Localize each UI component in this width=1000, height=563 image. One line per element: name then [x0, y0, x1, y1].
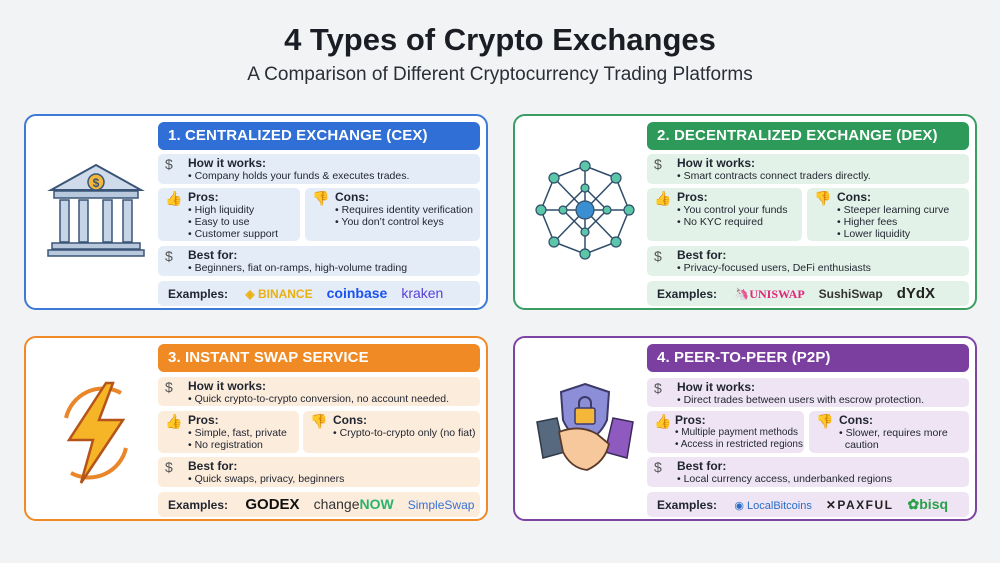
best for: • Privacy-focused users, DeFi enthusiasts — [677, 262, 871, 274]
how it works: How it works: — [188, 156, 266, 170]
pros: • No registration — [188, 439, 263, 451]
best for: • Quick swaps, privacy, beginners — [188, 473, 344, 485]
how it works: $ — [654, 156, 662, 172]
cons: 👎 — [814, 190, 831, 206]
cons: • Lower liquidity — [837, 228, 910, 240]
pros: • Easy to use — [188, 216, 249, 228]
panel: CEX — [24, 114, 488, 310]
icon: network — [535, 160, 635, 260]
how it works: • Company holds your funds & executes trades. — [188, 170, 409, 182]
cons: Cons: — [333, 413, 367, 427]
examples — [647, 492, 969, 517]
cons: 👎 — [310, 413, 327, 429]
pros: 👍 — [165, 190, 182, 206]
cons: caution — [845, 439, 879, 451]
cons: 👎 — [312, 190, 329, 206]
icon: bank: $ — [93, 176, 100, 190]
heading — [647, 122, 969, 150]
pros — [647, 411, 804, 453]
title: 4 Types of Crypto Exchanges — [284, 22, 716, 57]
best for — [647, 457, 969, 487]
cons: Cons: — [837, 190, 871, 204]
how it works — [158, 377, 480, 406]
pros: • Simple, fast, private — [188, 427, 287, 439]
best for: Best for: — [188, 459, 237, 473]
how it works: $ — [165, 156, 173, 172]
pros: Pros: — [188, 190, 219, 204]
examples: Examples: GODEX changeNOW SimpleSwap — [168, 496, 474, 513]
cons — [809, 411, 969, 453]
heading: 1. CENTRALIZED EXCHANGE (CEX) — [168, 127, 428, 144]
best for: $ — [654, 459, 662, 475]
examples — [647, 281, 969, 306]
how it works: How it works: — [188, 379, 266, 393]
cons: • Slower, requires more — [839, 427, 948, 439]
cons: Cons: — [335, 190, 369, 204]
how it works: • Smart contracts connect traders directly. — [677, 170, 871, 182]
cons: Cons: — [839, 413, 873, 427]
pros: • Multiple payment methods — [675, 427, 798, 438]
heading: 4. PEER-TO-PEER (P2P) — [657, 349, 831, 366]
heading: 2. DECENTRALIZED EXCHANGE (DEX) — [657, 127, 938, 144]
cons — [807, 188, 969, 241]
pros: Pros: — [675, 413, 706, 427]
pros: • High liquidity — [188, 204, 254, 216]
cons — [305, 188, 480, 241]
pros: • Access in restricted regions — [675, 439, 803, 450]
pros: Pros: — [677, 190, 708, 204]
cons: • Steeper learning curve — [837, 204, 949, 216]
best for: • Beginners, fiat on-ramps, high-volume trading — [188, 262, 407, 274]
best for: $ — [165, 248, 173, 264]
panel: DEX — [513, 114, 977, 310]
heading: 3. INSTANT SWAP SERVICE — [168, 349, 369, 366]
how it works: How it works: — [677, 156, 755, 170]
panel: P2P — [513, 336, 977, 521]
pros: • Customer support — [188, 228, 278, 240]
best for: • Local currency access, underbanked regions — [677, 473, 892, 485]
pros — [647, 188, 802, 241]
best for: Best for: — [188, 248, 237, 262]
cons: • Higher fees — [837, 216, 897, 228]
heading — [647, 344, 969, 372]
cons: • Crypto-to-crypto only (no fiat) — [333, 427, 476, 439]
how it works: • Quick crypto-to-crypto conversion, no account needed. — [188, 393, 449, 405]
best for: Best for: — [677, 459, 726, 473]
best for: $ — [165, 459, 173, 475]
how it works: $ — [654, 380, 662, 396]
examples — [158, 492, 480, 517]
pros — [158, 411, 299, 453]
examples — [158, 281, 480, 306]
how it works — [647, 378, 969, 407]
how it works: • Direct trades between users with escrow protection. — [677, 394, 924, 406]
pros — [158, 188, 300, 241]
icon: lightning — [64, 382, 128, 484]
pros: • No KYC required — [677, 216, 763, 228]
cons — [303, 411, 480, 453]
pros: 👍 — [654, 190, 671, 206]
subtitle: A Comparison of Different Cryptocurrency Trading Platforms — [247, 64, 753, 85]
best for — [647, 246, 969, 276]
pros: 👍 — [654, 413, 671, 429]
how it works — [647, 154, 969, 184]
best for — [158, 457, 480, 487]
cons: 👎 — [816, 413, 833, 429]
heading — [158, 122, 480, 150]
pros: Pros: — [188, 413, 219, 427]
pros: 👍 — [165, 413, 182, 429]
how it works: $ — [165, 379, 173, 395]
examples: Examples: ◉ LocalBitcoins ✕PAXFUL ✿bisq — [657, 496, 948, 512]
cons: • Requires identity verification — [335, 204, 473, 216]
pros: • You control your funds — [677, 204, 788, 216]
best for: Best for: — [677, 248, 726, 262]
icon: bank — [47, 164, 145, 257]
icon: handshake shield — [536, 383, 634, 471]
best for: $ — [654, 248, 662, 264]
examples: Examples: 🦄UNISWAP SushiSwap dYdX — [657, 285, 935, 302]
examples: Examples: ◈ BINANCE coinbase kraken — [168, 285, 443, 301]
cons: • You don’t control keys — [335, 216, 444, 228]
how it works — [158, 154, 480, 184]
heading — [158, 344, 480, 372]
panel: instant swap — [24, 336, 488, 521]
best for — [158, 246, 480, 276]
how it works: How it works: — [677, 380, 755, 394]
